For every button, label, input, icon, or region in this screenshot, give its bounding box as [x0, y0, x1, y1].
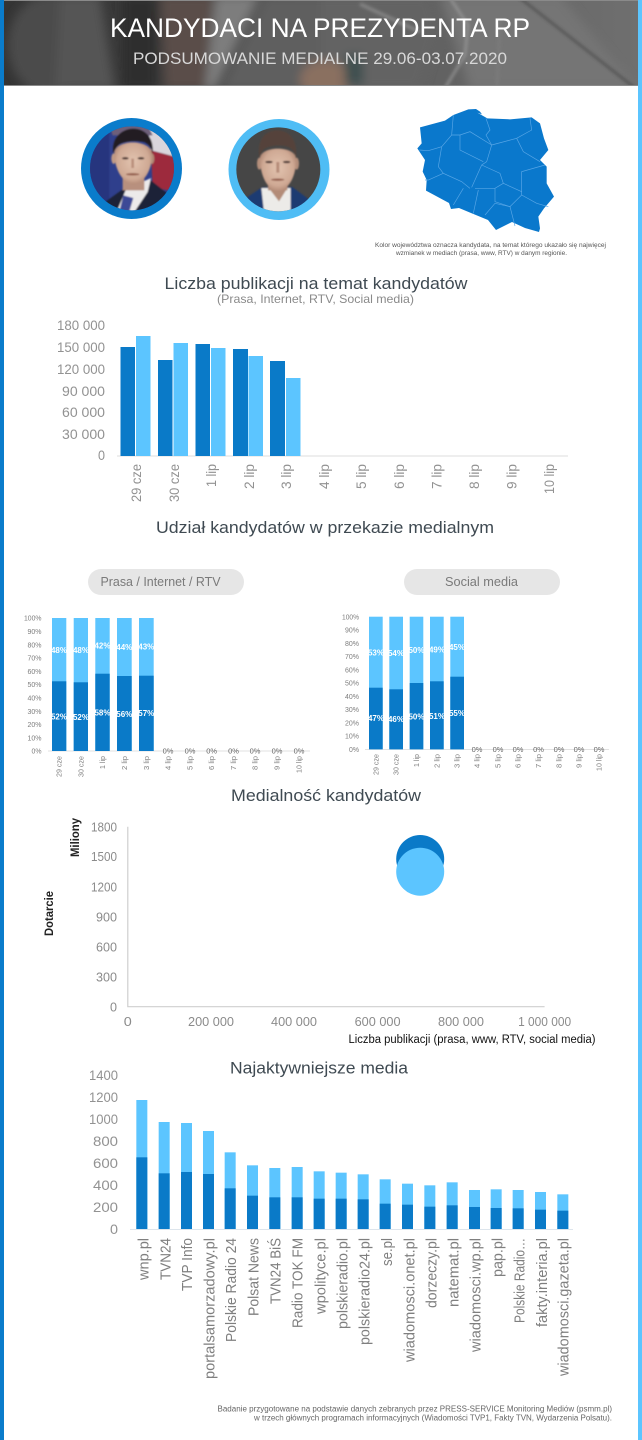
- x axis labels: 400 000: [271, 1014, 317, 1029]
- subheading: media types: (Prasa, Internet, RTV, Social media): [217, 292, 414, 306]
- value labels: 50%: [408, 712, 425, 722]
- map caption: wzmianek w mediach (prasa, www, RTV) w danym regionie.: [395, 250, 567, 257]
- bars: [52, 618, 154, 751]
- x axis labels: 7 lip: [534, 754, 543, 768]
- value labels: [368, 643, 605, 754]
- y axis labels: 50%: [345, 679, 359, 688]
- x axis labels: 6 lip: [207, 756, 216, 770]
- value labels: 0%: [594, 745, 605, 754]
- footnote: w trzech głównych programach informacyjnych (Wiadomości TVP1, Fakty TVN, Wydarzenia Polsatu).: [253, 1414, 612, 1422]
- footnote: Badanie przygotowane na podstawie danych zebranych przez PRESS-SERVICE Monitoring Mediów (psmm.pl): [218, 1404, 612, 1414]
- map of Poland: [417, 109, 554, 232]
- value labels: 0%: [574, 745, 585, 754]
- x axis labels: 8 lip: [466, 464, 482, 489]
- y axis labels: 1000: [89, 1111, 118, 1127]
- x axis labels: TVN24 BiŚ: [266, 1238, 284, 1304]
- y axis labels: 20%: [345, 718, 359, 728]
- y axis labels: 0: [110, 1221, 118, 1237]
- bar chart: most active media: [89, 1067, 573, 1379]
- x axis labels: 10 lip: [294, 756, 304, 773]
- value labels: 0%: [206, 746, 217, 756]
- value labels: 0%: [513, 745, 524, 754]
- y axis labels: 200: [93, 1199, 118, 1215]
- y axis labels: 600: [93, 1155, 118, 1171]
- value labels: 56%: [116, 710, 132, 719]
- y axis labels: 30 000: [62, 426, 105, 442]
- y axis labels: 90%: [345, 626, 359, 635]
- header banner: [4, 0, 638, 86]
- y axis labels: 60%: [345, 665, 359, 674]
- value labels: 0%: [272, 746, 283, 756]
- y axis labels: 10%: [28, 733, 42, 742]
- x axis labels: 1 lip: [203, 464, 219, 487]
- y axis labels: 90 000: [62, 383, 105, 399]
- value labels: 0%: [472, 745, 483, 754]
- x axis labels: 29 cze: [372, 754, 380, 775]
- heading: number of publications: Liczba publikacji na temat kandydatów: [164, 274, 468, 293]
- y axis labels: 60 000: [62, 404, 105, 420]
- x axis labels: 30 cze: [166, 464, 182, 502]
- map caption: [375, 242, 606, 257]
- value labels: 50%: [408, 646, 425, 655]
- axis unit: millions: Miliony: [70, 817, 82, 857]
- value labels: 52%: [73, 713, 89, 722]
- y axis labels: 40%: [28, 694, 42, 702]
- x axis labels: 9 lip: [272, 756, 282, 770]
- x axis labels: 29 cze: [128, 464, 144, 502]
- y axis labels: 1400: [89, 1067, 118, 1083]
- x axis labels: 3 lip: [142, 756, 151, 770]
- value labels: 55%: [449, 709, 465, 718]
- value labels: 0%: [185, 746, 196, 756]
- y axis labels: 0: [98, 447, 105, 463]
- y axis labels: 800: [93, 1133, 118, 1149]
- y axis labels: 300: [96, 970, 117, 984]
- left edge stripe: [0, 0, 4, 1440]
- y axis labels: 150 000: [57, 339, 105, 355]
- bars: [136, 1100, 568, 1229]
- value labels: 0%: [533, 745, 544, 754]
- x axis labels: 30 cze: [76, 756, 86, 777]
- x axis labels: 4 lip: [472, 754, 482, 768]
- y axis labels: 70%: [28, 654, 42, 663]
- y axis labels: 1800: [91, 820, 117, 834]
- x axis labels: 10 lip: [541, 464, 557, 494]
- x axis labels: 5 lip: [494, 754, 502, 768]
- axis title: publications: Liczba publikacji (prasa, www, RTV, social media): [348, 1034, 596, 1046]
- x axis labels: wpolityce.pl: [312, 1238, 329, 1315]
- x axis labels: [136, 1238, 573, 1379]
- x axis labels: natemat.pl: [446, 1238, 463, 1307]
- value labels: 49%: [429, 646, 445, 654]
- y axis labels: 30%: [28, 707, 42, 716]
- x axis labels: Polsat News: [245, 1238, 262, 1316]
- x axis labels: polskieradio24.pl: [357, 1238, 374, 1345]
- value labels: 42%: [94, 642, 111, 650]
- value labels: 52%: [51, 712, 67, 722]
- y axis labels: 0: [110, 1000, 117, 1014]
- y axis labels: 1200: [89, 1089, 118, 1105]
- x axis labels: 600 000: [355, 1014, 401, 1029]
- value labels: 0%: [250, 746, 261, 756]
- y axis labels: 40%: [345, 692, 359, 701]
- x axis labels: 30 cze: [392, 754, 400, 775]
- x axis labels: 1 000 000: [518, 1014, 571, 1029]
- value labels: 54%: [388, 649, 404, 658]
- x axis labels: fakty.interia.pl: [534, 1238, 551, 1327]
- y axis labels: [57, 317, 105, 463]
- bars: [120, 336, 300, 456]
- right edge stripe: [638, 0, 642, 1440]
- y axis labels: 1200: [91, 880, 117, 894]
- pill: press / internet / RTV: Prasa / Internet / RTV: [100, 574, 221, 589]
- x axis labels: 7 lip: [428, 464, 444, 489]
- x axis labels: 4 lip: [316, 464, 332, 489]
- map caption: Kolor województwa oznacza kandydata, na temat którego ukazało się najwięcej: [375, 242, 606, 249]
- x axis labels: 10 lip: [594, 754, 604, 771]
- x axis labels: polskieradio.pl: [335, 1238, 352, 1329]
- y axis labels: 100%: [24, 614, 42, 623]
- x axis labels: [124, 1014, 571, 1029]
- x axis labels: wnp.pl: [136, 1238, 152, 1281]
- bubble chart: media presence: [44, 817, 596, 1046]
- y axis labels: 60%: [28, 667, 42, 676]
- value labels: 0%: [163, 746, 174, 756]
- stacked chart: press / internet / RTV: [24, 614, 310, 777]
- value labels: 0%: [228, 746, 239, 756]
- x axis labels: Radio TOK FM: [290, 1238, 307, 1328]
- x axis labels: 3 lip: [452, 754, 462, 768]
- value labels: 48%: [73, 646, 89, 655]
- y axis labels: 80%: [345, 639, 359, 648]
- y axis labels: 600: [96, 940, 117, 954]
- y axis labels: 20%: [28, 720, 42, 729]
- y axis labels: [342, 612, 359, 754]
- x axis labels: TVN24: [157, 1238, 174, 1280]
- x axis labels: 29 cze: [54, 756, 64, 777]
- value labels: 43%: [138, 642, 154, 652]
- value labels: 0%: [493, 745, 504, 754]
- value labels: 47%: [368, 714, 384, 723]
- value labels: 58%: [94, 708, 111, 718]
- y axis labels: 10%: [345, 732, 359, 741]
- y axis labels: 30%: [345, 705, 359, 714]
- x axis labels: 2 lip: [241, 464, 257, 489]
- y axis labels: 90%: [28, 627, 42, 636]
- value labels: 45%: [449, 643, 465, 652]
- x axis labels: wiadomosci.gazeta.pl: [556, 1238, 573, 1377]
- x axis labels: pap.pl: [490, 1238, 507, 1277]
- x axis labels: portalsamorzadowy.pl: [201, 1238, 218, 1379]
- footnote: [218, 1404, 612, 1422]
- x axis labels: 4 lip: [164, 756, 172, 770]
- x axis labels: wiadomosci.onet.pl: [401, 1238, 418, 1363]
- title: KANDYDACI NA PREZYDENTA RP: [110, 13, 530, 43]
- value labels: 46%: [388, 715, 404, 724]
- value labels: 53%: [368, 648, 384, 658]
- axis title: reach: Dotarcie: [44, 891, 56, 936]
- y axis labels: 400: [93, 1177, 118, 1193]
- x axis labels: [372, 754, 604, 775]
- x axis labels: [128, 464, 557, 502]
- bar chart: publications per day: [57, 317, 568, 502]
- x axis labels: 0: [124, 1014, 132, 1029]
- x axis labels: 800 000: [438, 1014, 484, 1029]
- subtitle: PODSUMOWANIE MEDIALNE 29.06-03.07.2020: [133, 49, 507, 68]
- pill: social media: Social media: [445, 574, 519, 589]
- value labels: [51, 642, 305, 756]
- y axis labels: [91, 820, 117, 1014]
- x axis labels: 1 lip: [412, 754, 421, 767]
- y axis labels: 80%: [28, 640, 42, 649]
- x axis labels: [54, 756, 304, 777]
- heading: most active media: Najaktywniejsze media: [230, 1058, 409, 1078]
- x axis labels: 200 000: [188, 1014, 234, 1029]
- y axis labels: 0%: [32, 747, 42, 756]
- x axis labels: wiadomosci.wp.pl: [467, 1238, 484, 1353]
- x axis labels: 9 lip: [574, 754, 584, 768]
- pill: press / internet / RTV: [88, 569, 244, 595]
- x axis labels: 3 lip: [278, 464, 294, 489]
- heading: candidates' share: Udział kandydatów w przekazie medialnym: [156, 518, 494, 537]
- value labels: 44%: [116, 643, 132, 652]
- y axis labels: [24, 614, 42, 756]
- x axis labels: dorzeczy.pl: [423, 1238, 440, 1308]
- y axis labels: 70%: [345, 652, 359, 661]
- bars: [369, 617, 464, 749]
- x axis labels: 9 lip: [504, 464, 520, 489]
- x axis labels: 6 lip: [514, 754, 522, 768]
- bubble: second candidate: [396, 848, 444, 896]
- stacked chart: social media: [342, 612, 609, 775]
- y axis labels: [89, 1067, 118, 1237]
- x axis labels: 8 lip: [250, 756, 260, 770]
- portrait: Andrzej Duda: [81, 118, 182, 219]
- x axis labels: 1 lip: [98, 756, 107, 769]
- value labels: 51%: [429, 712, 445, 721]
- x axis labels: 6 lip: [391, 464, 407, 489]
- bubble: first candidate: [396, 835, 444, 883]
- x axis labels: Polskie Radio…: [512, 1238, 529, 1323]
- y axis labels: 180 000: [57, 317, 105, 333]
- portrait: Rafał Trzaskowski: [228, 119, 330, 220]
- heading: media presence: Medialność kandydatów: [231, 786, 422, 805]
- x axis labels: 8 lip: [554, 754, 564, 768]
- value labels: 57%: [138, 709, 154, 718]
- x axis labels: 7 lip: [229, 756, 238, 770]
- value labels: 0%: [294, 746, 305, 756]
- x axis labels: 5 lip: [353, 464, 369, 489]
- x axis labels: 2 lip: [120, 756, 129, 770]
- y axis labels: 100%: [342, 612, 359, 621]
- y axis labels: 900: [96, 910, 117, 924]
- value labels: 48%: [51, 646, 67, 655]
- y axis labels: 120 000: [57, 361, 105, 377]
- x axis labels: TVP Info: [179, 1238, 196, 1291]
- y axis labels: 0%: [349, 745, 359, 754]
- x axis labels: 5 lip: [186, 756, 194, 770]
- x axis labels: Polskie Radio 24: [223, 1238, 240, 1342]
- y axis labels: 50%: [28, 680, 42, 689]
- pill: social media: [404, 569, 560, 595]
- y axis labels: 1500: [91, 849, 117, 864]
- x axis labels: 2 lip: [432, 754, 442, 768]
- x axis labels: se.pl: [379, 1238, 396, 1266]
- value labels: 0%: [554, 745, 565, 754]
